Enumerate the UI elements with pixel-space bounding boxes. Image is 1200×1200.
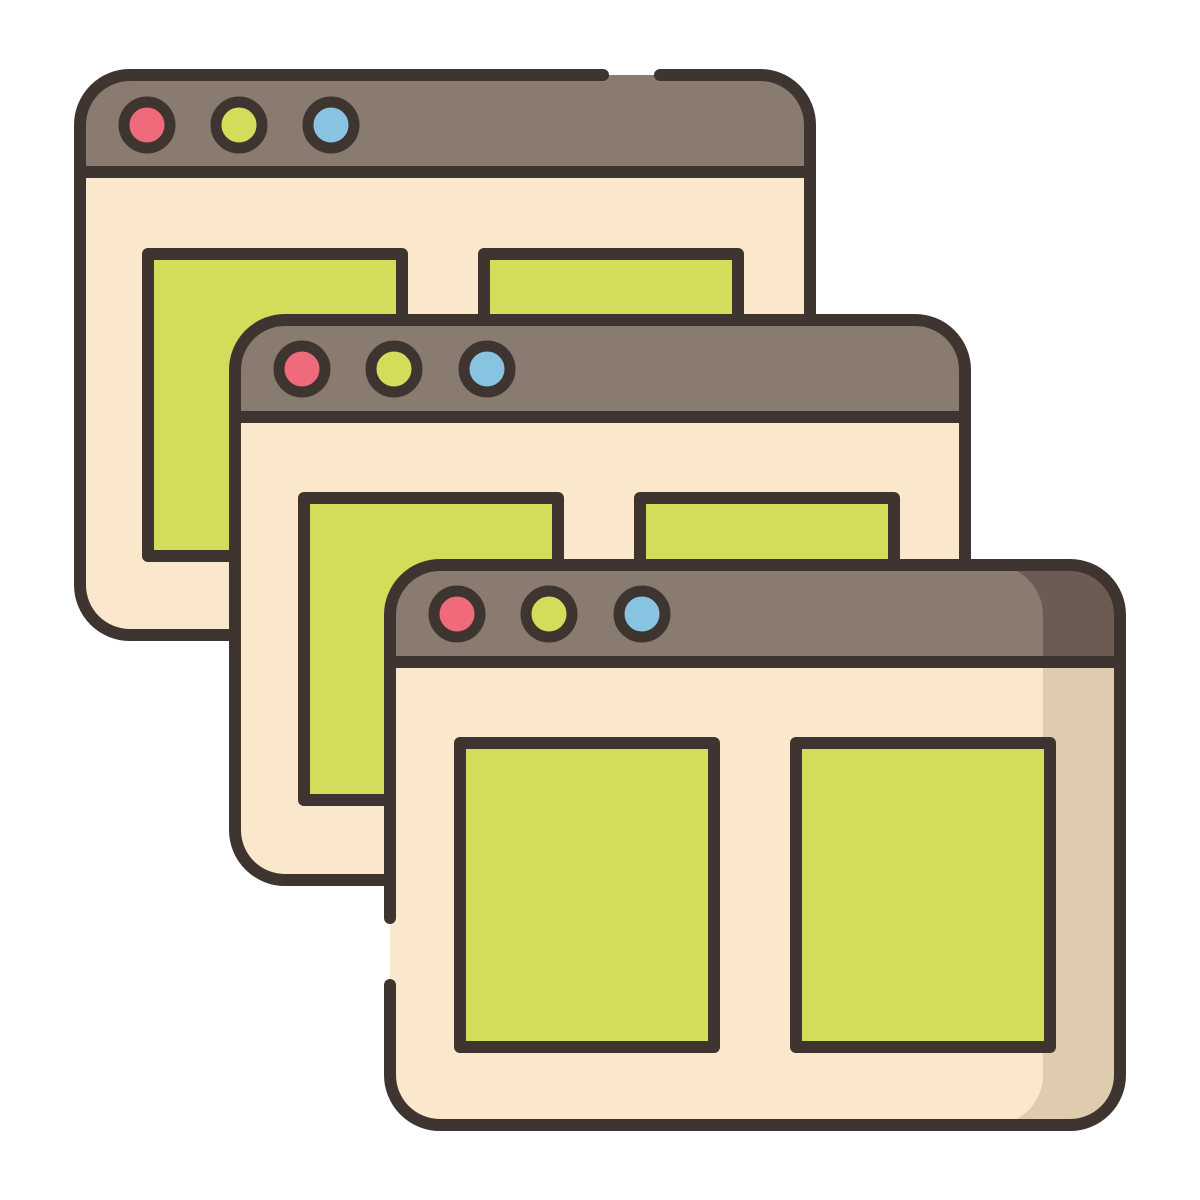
window dots [279,346,510,392]
window: front [390,565,1120,1125]
window: back [80,75,810,635]
window dots [124,102,354,148]
illustration: stacked browser windows [74,69,1126,1131]
content panels [460,743,1050,1047]
content panels [304,498,894,800]
content panels [148,254,738,556]
window dots [434,591,665,637]
window: middle [235,320,965,880]
